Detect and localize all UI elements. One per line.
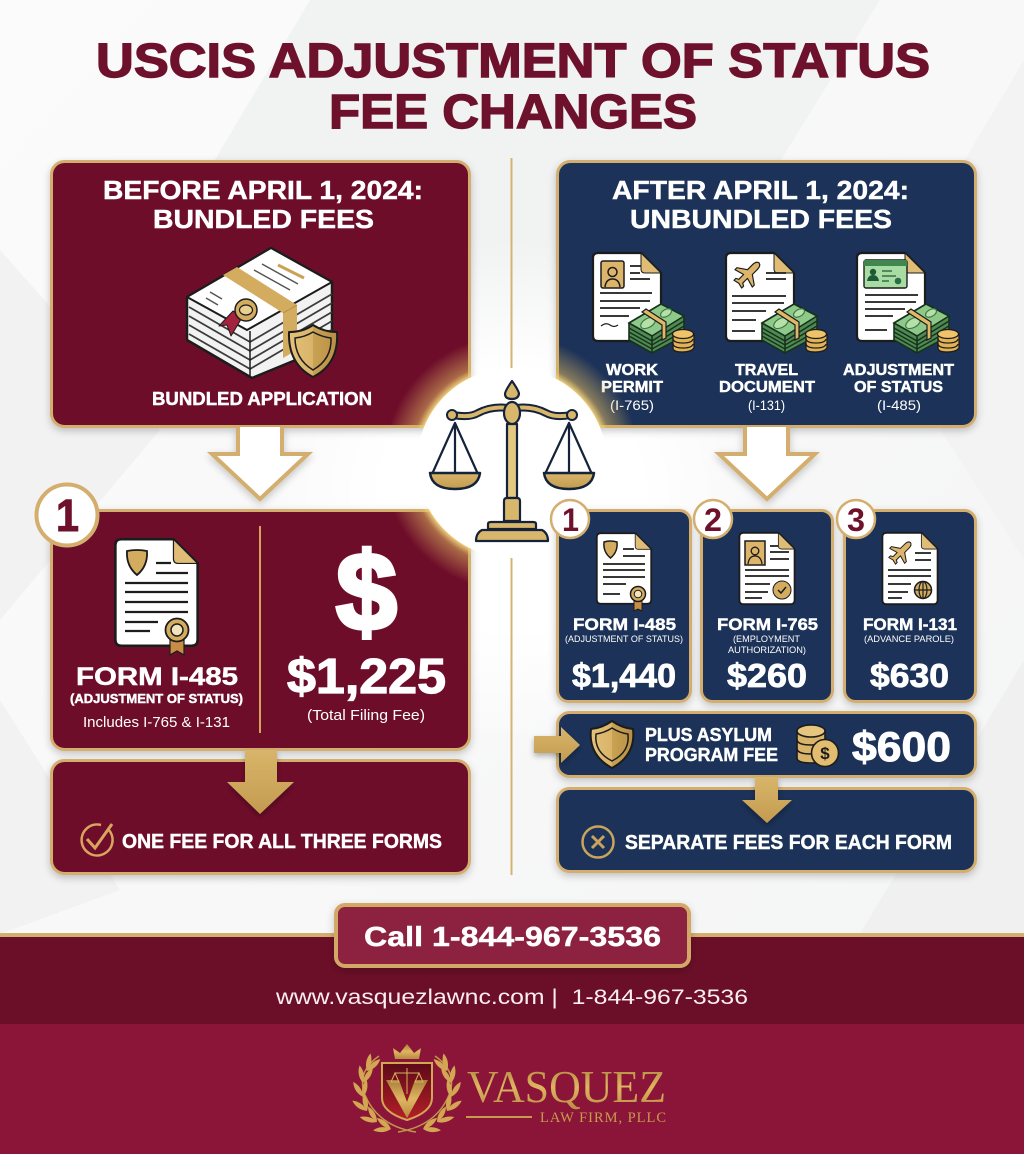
icon: form I-485 document (115, 539, 198, 655)
labels: travel document: DOCUMENT (719, 379, 816, 396)
arrow: after to forms (719, 427, 815, 499)
panel: one fee for all three forms (52, 760, 470, 874)
labels: adjustment of status: ADJUSTMENT (843, 362, 955, 379)
title: FEE CHANGES (329, 86, 697, 139)
badge: 2 (694, 500, 732, 538)
panel: separate fees for each form (558, 788, 976, 872)
icon: adjustment of status document with money (857, 253, 959, 353)
labels: travel document: (I-131) (748, 397, 785, 413)
fee text: I-765: AUTHORIZATION) (728, 645, 806, 656)
panel: after April 1, 2024 (558, 162, 976, 426)
fee text: I-131: FORM I-131 (863, 615, 957, 634)
icon: coins: $ (820, 744, 830, 763)
call button: Call 1-844-967-3536 (364, 921, 661, 952)
panel heading: after (612, 175, 909, 234)
fee text: I-765 (717, 615, 818, 694)
form name and description: (ADJUSTMENT OF STATUS) (70, 691, 243, 706)
logo: Vasquez Law Firm (351, 1044, 666, 1133)
fee text: I-131 (863, 615, 957, 694)
arrow: plus asylum (534, 727, 580, 763)
panel: before April 1, 2024 (52, 162, 470, 426)
icon: I-765 document (739, 533, 795, 604)
panel heading: before: BUNDLED FEES (153, 204, 374, 234)
panel heading: after: UNBUNDLED FEES (630, 204, 892, 234)
title: USCIS ADJUSTMENT OF STATUS (96, 35, 930, 88)
panel: form I-765 fee (702, 510, 832, 702)
fee text: I-485: (ADJUSTMENT OF STATUS) (565, 634, 683, 645)
labels: work permit: PERMIT (601, 379, 664, 396)
glow around scale medallion (392, 346, 632, 580)
panel heading: before (103, 175, 423, 234)
fee text: I-765: FORM I-765 (717, 615, 818, 634)
label: bundled application: BUNDLED APPLICATION (152, 389, 372, 409)
badge: 1 (36, 484, 98, 546)
fee text: I-131: (ADVANCE PAROLE) (864, 634, 954, 645)
panel heading: before: BEFORE APRIL 1, 2024: (103, 175, 423, 205)
badge: 1 (I-485) (551, 500, 589, 538)
asylum fee amount: $600 (852, 723, 951, 770)
icon: I-131 document (882, 533, 938, 604)
labels: adjustment of status (843, 362, 955, 413)
labels: adjustment of status: OF STATUS (854, 379, 943, 396)
icon: check circle (82, 824, 113, 855)
labels: travel document (719, 362, 816, 413)
panel: bundled form I-485 (52, 510, 470, 750)
badge: 1 (I-485): 1 (562, 502, 579, 538)
panel: form I-485 fee (558, 510, 690, 702)
panel: asylum program fee (558, 712, 976, 776)
total filing fee: (Total Filing Fee) (307, 708, 425, 724)
icon: scales of justice (430, 381, 594, 541)
labels: work permit: (I-765) (610, 397, 654, 413)
badge: 1: 1 (56, 490, 79, 541)
center divider (510, 158, 512, 875)
icon: bundled application stack (187, 248, 337, 378)
badge: 3 (837, 500, 875, 538)
icon: x circle (582, 826, 614, 858)
total filing fee: $1,225 (287, 650, 446, 704)
logo wordmark: VASQUEZ (467, 1062, 666, 1112)
call button (336, 905, 689, 966)
icon: work permit document with money (593, 253, 694, 353)
form name and description: Includes I-765 & I-131 (83, 715, 230, 731)
icon: shield (591, 721, 633, 768)
badge: 3: 3 (847, 502, 865, 538)
arrow: one fee (227, 750, 294, 814)
total filing fee (287, 531, 446, 724)
contact line: www.vasquezlawnc.com | 1-844-967-3536 (275, 986, 748, 1009)
fee text: I-485: $1,440 (572, 657, 676, 694)
title (96, 35, 930, 139)
arrow: before to form (212, 427, 308, 499)
icon: coins (797, 725, 838, 766)
scale medallion background (417, 368, 607, 558)
asylum fee label: PROGRAM FEE (645, 745, 778, 765)
fee text: I-485 (565, 615, 683, 694)
icon: I-485 document (597, 533, 651, 611)
labels: adjustment of status: (I-485) (877, 397, 921, 413)
logo emblem (351, 1044, 463, 1133)
form name and description (70, 663, 243, 731)
labels: travel document: TRAVEL (735, 362, 798, 379)
labels: work permit: WORK (606, 362, 659, 379)
fee text: I-765: $260 (727, 657, 807, 694)
fee text: I-485: FORM I-485 (573, 615, 676, 634)
form name and description: FORM I-485 (76, 663, 238, 691)
asylum fee label: PLUS ASYLUM (645, 725, 772, 745)
separate fees text: SEPARATE FEES FOR EACH FORM (625, 832, 952, 854)
one fee text: ONE FEE FOR ALL THREE FORMS (122, 831, 442, 853)
labels: work permit (601, 362, 664, 413)
panel: form I-131 fee (844, 510, 976, 702)
icon: travel document with money (726, 253, 827, 353)
footer band (0, 933, 1024, 1154)
fee text: I-765: (EMPLOYMENT (733, 634, 800, 645)
asylum fee label (645, 725, 778, 765)
logo wordmark: LAW FIRM, PLLC (540, 1110, 666, 1126)
panel heading: after: AFTER APRIL 1, 2024: (612, 175, 909, 205)
total filing fee: $ (336, 531, 397, 654)
fee text: I-131: $630 (870, 657, 949, 694)
badge: 2: 2 (704, 502, 722, 538)
arrow: separate fees (742, 777, 792, 823)
